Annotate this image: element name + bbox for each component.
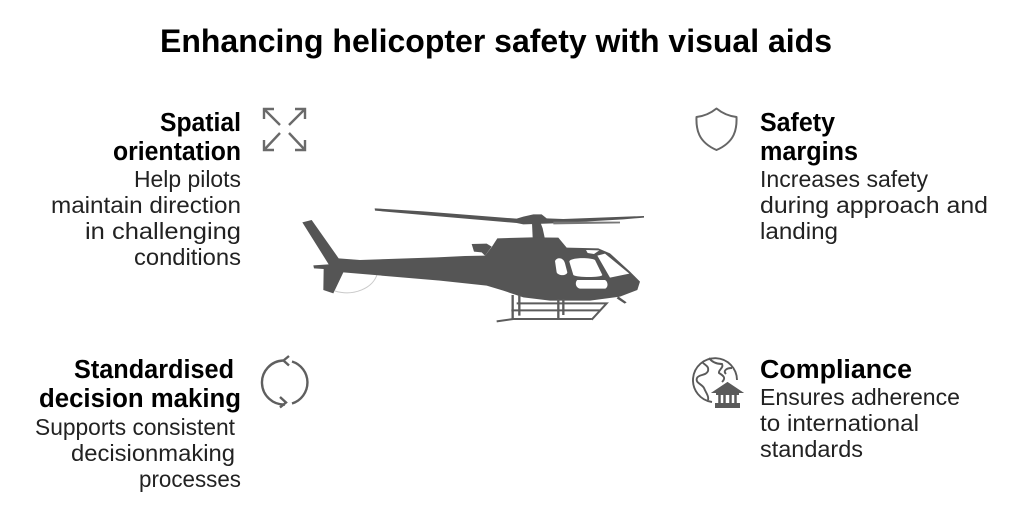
engine exhaust bbox=[472, 244, 492, 256]
text: safety margins description: landing bbox=[760, 218, 838, 244]
panel: compliance bbox=[693, 356, 960, 462]
panel: standardised decision making bbox=[35, 356, 307, 492]
text: compliance description: to international bbox=[760, 410, 919, 436]
heading: spatial orientation: orientation bbox=[113, 138, 241, 166]
text: spatial orientation description: in challenging bbox=[85, 218, 241, 244]
icon: expanding arrows bbox=[264, 109, 305, 150]
heading: spatial orientation: Spatial bbox=[160, 109, 241, 137]
main rotor bbox=[375, 208, 644, 224]
text: standardised decision making description bbox=[35, 414, 241, 492]
helicopter silhouette bbox=[302, 208, 644, 321]
text: spatial orientation description bbox=[51, 166, 241, 270]
nose antenna bbox=[617, 296, 627, 304]
text: safety margins description bbox=[760, 166, 988, 244]
heading: safety margins: Safety bbox=[760, 109, 836, 137]
heading: safety margins bbox=[760, 109, 858, 166]
icon: shield bbox=[696, 108, 737, 150]
panel: spatial orientation bbox=[51, 109, 305, 270]
landing skids bbox=[497, 295, 607, 321]
heading: compliance: Compliance bbox=[760, 356, 912, 384]
fuselage bbox=[302, 220, 640, 301]
icon: globe with institution bbox=[693, 358, 741, 408]
tail rotor guard arc bbox=[335, 274, 377, 293]
heading: safety margins: margins bbox=[760, 138, 858, 166]
heading: standardised decision making: Standardised bbox=[74, 356, 234, 384]
text: spatial orientation description: Help pilots bbox=[134, 166, 241, 192]
text: spatial orientation description: conditions bbox=[134, 244, 241, 270]
title: Enhancing helicopter safety with visual aids bbox=[160, 23, 832, 59]
panel: safety margins bbox=[696, 108, 988, 244]
text: safety margins description: during approach and bbox=[760, 192, 988, 218]
text: compliance description: standards bbox=[760, 436, 863, 462]
text: standardised decision making description: processes bbox=[139, 466, 241, 492]
heading: standardised decision making bbox=[39, 356, 241, 413]
text: standardised decision making description: decisionmaking bbox=[71, 440, 235, 466]
text: compliance description bbox=[760, 384, 960, 462]
heading: spatial orientation bbox=[113, 109, 241, 166]
text: standardised decision making description: Supports consistent bbox=[35, 414, 235, 440]
text: safety margins description: Increases safety bbox=[760, 166, 928, 192]
heading: standardised decision making: decision making bbox=[39, 385, 241, 413]
text: spatial orientation description: maintain direction bbox=[51, 192, 241, 218]
icon: circular arrows bbox=[262, 356, 307, 408]
text: compliance description: Ensures adherence bbox=[760, 384, 960, 410]
